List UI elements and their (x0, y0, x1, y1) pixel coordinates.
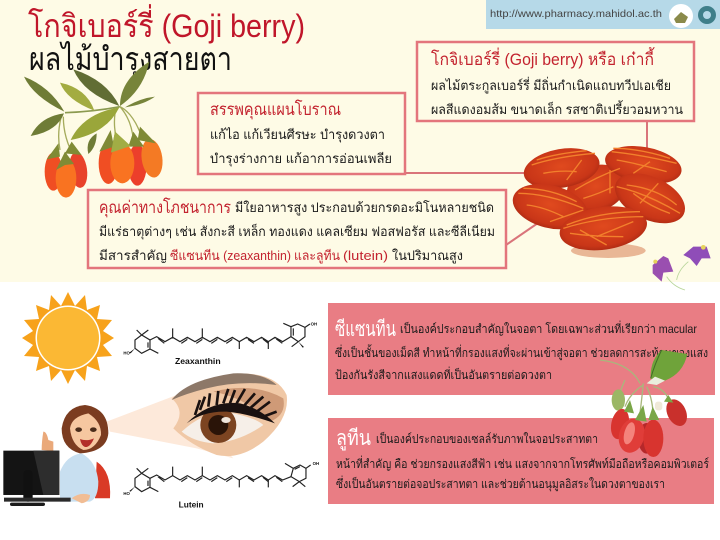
chemical structure: zeaxanthin: HO (123, 350, 130, 355)
panel: nutritional value: ในปริมาณสูง (392, 248, 463, 264)
panel: nutritional value: ซีแซนทีน (zeaxanthin) (170, 248, 291, 263)
lutein text: ซึ่งเป็นอันตรายต่อจอประสาทตา และช่วยต้านอนุมูลอิสระในดวงตาของเรา (336, 475, 665, 492)
panel: goji berry definition (417, 42, 694, 121)
zeaxanthin text: ซีแซนทีน (335, 318, 396, 341)
zeaxanthin text (335, 318, 708, 382)
panel: nutritional value: มีแร่ธาตุต่างๆ เช่น สังกะสี เหล็ก ทองแดง แคลเซียม ฟอสฟอรัส และซีลีเนียม (99, 222, 495, 240)
panel: traditional medicine properties (198, 93, 405, 174)
illustration: dried goji berries (508, 141, 693, 258)
illustration: woman at computer (3, 405, 110, 506)
leaves (24, 62, 155, 154)
illustration: goji branch (24, 62, 165, 198)
icon: sun (22, 292, 114, 384)
website banner: http://www.pharmacy.mahidol.ac.th (490, 8, 662, 20)
chemical structure: zeaxanthin: OH (311, 322, 317, 327)
panel: nutritional value: (lutein) (343, 248, 388, 263)
panel: traditional medicine properties: แก้ไอ แก้เวียนศีรษะ บำรุงดวงตา (210, 127, 385, 143)
panel heading: โกจิเบอร์รี่ (Goji berry) หรือ เก๋ากี้ (431, 47, 655, 69)
title (28, 4, 305, 79)
title: ผลไม้บำรุงสายตา (29, 41, 232, 79)
panel: lutein (328, 418, 714, 504)
title: โกจิเบอร์รี่ (Goji berry) (28, 4, 305, 44)
molecule name: Lutein (179, 499, 204, 509)
chemical structure: lutein (123, 461, 319, 509)
lutein text (336, 427, 709, 492)
panel: nutritional value: และลูทีน (294, 248, 340, 264)
chemical structure: zeaxanthin (123, 322, 317, 366)
lutein text: ลูทีน (336, 427, 371, 451)
illustration: enlarged eye with view cone (107, 373, 287, 458)
panel: nutritional value (88, 190, 506, 268)
connector lines (406, 121, 647, 245)
lutein text: เป็นองค์ประกอบของเซลล์รับภาพในจอประสาทตา (376, 431, 598, 446)
zeaxanthin text: ป้องกันรังสีจากแสงแดดที่เป็นอันตรายต่อดวงตา (335, 366, 552, 382)
panel heading: คุณค่าทางโภชนาการ (99, 197, 231, 218)
illustration: fresh goji sprig (600, 350, 691, 457)
chemical structure: lutein: HO (123, 491, 130, 496)
panel: nutritional value: มีสารสำคัญ (99, 248, 167, 263)
panel: zeaxanthin (328, 303, 715, 395)
illustration: purple flowers (653, 245, 711, 290)
website banner (486, 0, 720, 29)
berries (45, 127, 165, 198)
molecule name: Zeaxanthin (175, 356, 221, 366)
chemical structure: lutein: OH (313, 461, 319, 466)
panel: goji berry definition: ผลสีแดงอมส้ม ขนาดเล็ก รสชาติเปรี้ยวอมหวาน (431, 100, 683, 117)
panel: goji berry definition: ผลไม้ตระกูลเบอร์รี่ มีถิ่นกำเนิดแถบทวีปเอเชีย (431, 77, 671, 94)
panel: traditional medicine properties: บำรุงร่างกาย แก้อาการอ่อนเพลีย (210, 151, 392, 167)
panel: nutritional value: มีใยอาหารสูง ประกอบด้วยกรดอะมิโนหลายชนิด (235, 200, 494, 216)
panel heading: สรรพคุณแผนโบราณ (210, 99, 341, 120)
